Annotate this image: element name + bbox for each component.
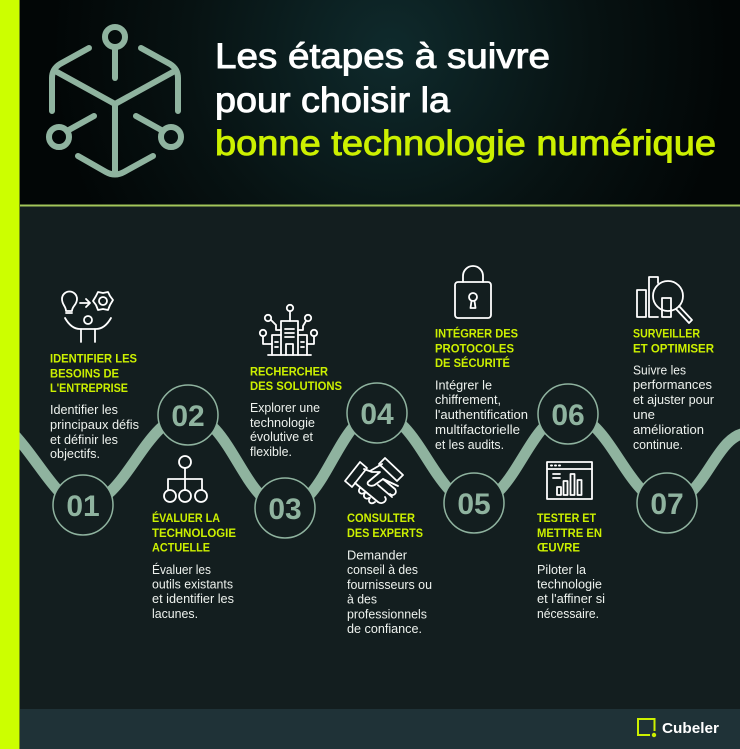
icon: dashboard window xyxy=(547,462,592,499)
panel: header background xyxy=(20,0,740,205)
step 6 text: METTRE EN xyxy=(537,526,602,540)
step 7 text xyxy=(633,326,714,452)
step 2 text: et identifier les xyxy=(152,592,234,606)
step number 04 xyxy=(347,383,407,443)
step 3 text: technologie xyxy=(250,416,315,430)
step 6 text xyxy=(537,511,605,621)
icon: org chart xyxy=(164,456,207,502)
step 4 text: conseil à des xyxy=(347,563,418,577)
step 3 text: RECHERCHER xyxy=(250,364,328,378)
left accent bar xyxy=(0,0,20,749)
step 4 text: Demander xyxy=(347,548,407,562)
step 4 text: de confiance. xyxy=(347,622,422,636)
step number 07: 07 xyxy=(650,488,684,521)
icon: handshake xyxy=(345,458,403,503)
step number 01 xyxy=(53,475,113,535)
step number 01: 01 xyxy=(66,490,100,523)
step 6 text: Piloter la xyxy=(537,563,586,577)
step 7 text: ET OPTIMISER xyxy=(633,342,714,356)
step 6 text: technologie xyxy=(537,578,602,592)
wave timeline xyxy=(8,413,740,508)
step 5 text: l'authentification xyxy=(435,408,528,422)
step 5 text: multifactorielle xyxy=(435,423,520,437)
step 3 text: flexible. xyxy=(250,445,292,459)
icon: connected building xyxy=(260,305,317,355)
step 1 text: Identifier les xyxy=(50,403,118,417)
step 1 text: L'ENTREPRISE xyxy=(50,381,128,395)
step 1 text: et définir les xyxy=(50,433,118,447)
step 3 text: Explorer une xyxy=(250,401,320,415)
step 5 text: Intégrer le xyxy=(435,378,492,392)
step 6 text: et l'affiner si xyxy=(537,592,605,606)
step 5 text: chiffrement, xyxy=(435,393,501,407)
step 5 text: PROTOCOLES xyxy=(435,342,514,356)
step number 03 xyxy=(255,478,315,538)
title: bonne technologie numérique xyxy=(215,124,716,163)
step 7 text: une xyxy=(633,408,655,422)
step 7 text: et ajuster pour xyxy=(633,393,714,407)
step 7 text: continue. xyxy=(633,438,683,452)
logo: Cubeler xyxy=(638,719,719,737)
step number 02 xyxy=(158,385,218,445)
step 7 text: SURVEILLER xyxy=(633,326,700,340)
step 5 text: DE SÉCURITÉ xyxy=(435,355,510,370)
step number 05 xyxy=(444,473,504,533)
step 4 text: CONSULTER xyxy=(347,511,415,525)
step 4 text: professionnels xyxy=(347,608,427,622)
step 4 text xyxy=(347,511,432,636)
step 7 text: Suivre les xyxy=(633,364,686,378)
step 4 text: à des xyxy=(347,592,377,606)
icon: idea to gear, person xyxy=(62,292,113,342)
step 4 text: fournisseurs ou xyxy=(347,578,432,592)
step 6 text: nécessaire. xyxy=(537,607,599,621)
icon: cube network xyxy=(49,27,181,174)
step 3 text: évolutive et xyxy=(250,430,314,444)
step number 05: 05 xyxy=(457,488,491,521)
title: Les étapes à suivre xyxy=(215,37,550,76)
step 5 text xyxy=(435,326,528,452)
icon: padlock xyxy=(455,266,491,318)
step 1 text: principaux défis xyxy=(50,418,139,432)
logo: Cubeler: Cubeler xyxy=(662,720,719,737)
step 2 text xyxy=(152,510,236,621)
step 3 text xyxy=(250,364,342,459)
step number 04: 04 xyxy=(360,398,394,431)
step 6 text: TESTER ET xyxy=(537,511,596,525)
step number 07 xyxy=(637,473,697,533)
step 6 text: ŒUVRE xyxy=(537,540,580,554)
step 7 text: performances xyxy=(633,378,712,392)
panel: footer band xyxy=(20,709,740,749)
step 2 text: TECHNOLOGIE xyxy=(152,526,236,540)
step 1 text: BESOINS DE xyxy=(50,366,119,380)
step 2 text: ACTUELLE xyxy=(152,540,210,554)
step 4 text: DES EXPERTS xyxy=(347,526,423,540)
title xyxy=(215,37,716,163)
step 7 text: amélioration xyxy=(633,423,704,437)
step number 03: 03 xyxy=(268,493,302,526)
step 5 text: et les audits. xyxy=(435,438,504,452)
icon: charts and magnifier xyxy=(637,277,692,323)
step 2 text: Évaluer les xyxy=(152,562,211,577)
step 1 text xyxy=(50,352,139,461)
header rule xyxy=(20,204,740,206)
step 1 text: IDENTIFIER LES xyxy=(50,352,137,366)
step number 06 xyxy=(538,384,598,444)
step number 06: 06 xyxy=(551,399,585,432)
panel: body background xyxy=(20,206,740,709)
step 1 text: objectifs. xyxy=(50,447,100,461)
step 5 text: INTÉGRER DES xyxy=(435,326,518,340)
step 3 text: DES SOLUTIONS xyxy=(250,379,342,393)
step 2 text: outils existants xyxy=(152,578,233,592)
step 2 text: ÉVALUER LA xyxy=(152,510,220,525)
step 2 text: lacunes. xyxy=(152,607,198,621)
title: pour choisir la xyxy=(215,81,451,120)
step number 02: 02 xyxy=(171,400,205,433)
